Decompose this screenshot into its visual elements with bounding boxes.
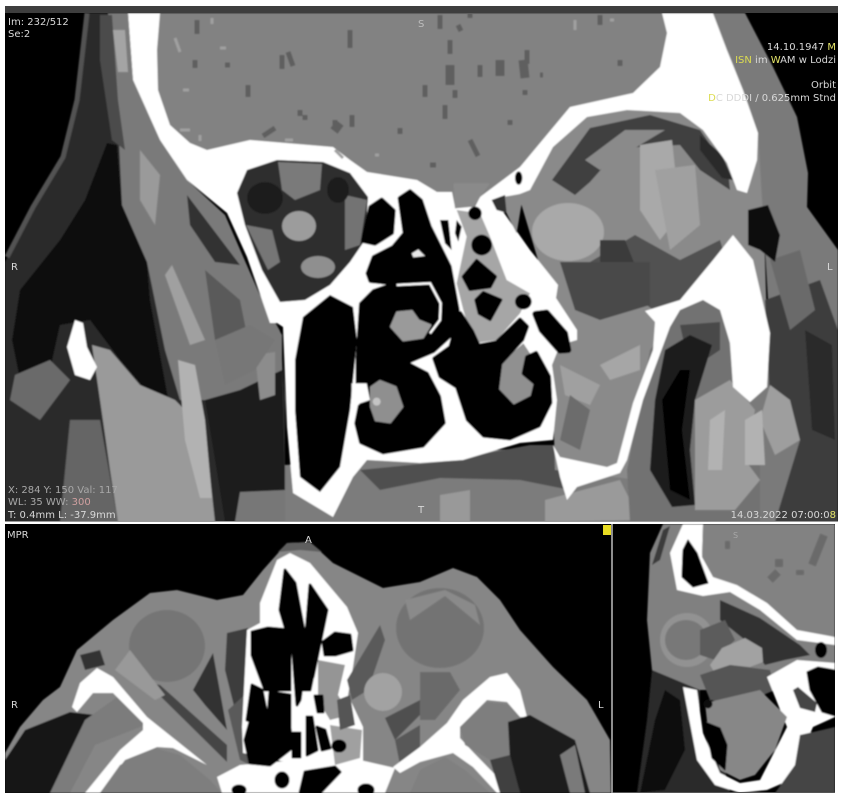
study date and time: 14.03.2022 07:00:08: [731, 510, 836, 521]
panel: axial MPR view: [5, 524, 611, 795]
brain tissue: [702, 524, 835, 637]
face soft tissue: [5, 542, 611, 793]
right lateral orbital bone: [72, 668, 207, 793]
divider between lower views: [611, 524, 613, 793]
right temporal fossa fat: [5, 712, 95, 793]
sphenoid soft tissue: [330, 725, 362, 765]
right temporal lobe: [100, 748, 222, 793]
lower panel edge: [5, 521, 838, 522]
orientation marker A: A: [305, 535, 312, 546]
facial soft tissue: [647, 524, 835, 690]
orientation marker S: S: [418, 19, 424, 30]
left temporalis and fat: [460, 702, 590, 793]
scan background: [613, 524, 835, 793]
lower border line: [613, 792, 835, 793]
left lateral orbital bone: [393, 673, 527, 793]
temporal bone fragment: [67, 320, 97, 380]
ethmoid and nasal air cells: [352, 171, 568, 452]
posterior ethmoid air: [815, 642, 827, 658]
panel: sagittal view: [613, 524, 835, 793]
brain tissue: [157, 13, 667, 207]
patient details: 14.10.1947 M: [767, 42, 836, 53]
sphenoid air: [807, 667, 835, 716]
cursor and window readout: T: 0.4mm L: -37.9mm: [7, 510, 116, 521]
frontal sinus air: [682, 540, 708, 587]
maxillary sinus air: [295, 295, 357, 492]
right-side facial soft tissue: [5, 13, 285, 522]
cursor and window readout: WL: 35 WW: 300: [8, 497, 91, 508]
nasal tip tissue: [278, 542, 322, 552]
maxillary sinus contents: [705, 690, 787, 780]
brain texture: [725, 535, 824, 580]
scan background: [5, 6, 838, 522]
orbital mass: [710, 638, 763, 675]
scan background: [5, 524, 611, 793]
right temporalis: [50, 695, 145, 793]
sphenoid bone: [217, 760, 395, 793]
orientation marker L: L: [598, 700, 604, 711]
left orbit and soft tissue base: [490, 13, 838, 522]
series info: Se:2: [8, 29, 30, 40]
maxillary sinus air: [705, 722, 727, 770]
patient details: DC DDDI / 0.625mm Stnd: [708, 93, 836, 104]
orbit dark fat: [720, 600, 810, 665]
top toolbar strip: [5, 6, 838, 13]
nasal bone and sinus frame: [242, 553, 363, 777]
sagittal CT anatomy: [637, 524, 835, 793]
patient details: Orbit: [811, 80, 836, 91]
axial CT anatomy: [5, 542, 611, 795]
orientation marker S: S: [733, 531, 738, 540]
left orbit tissue mass: [337, 588, 484, 765]
orientation marker R: R: [11, 262, 18, 273]
ethmoid soft tissue: [318, 660, 350, 720]
active view marker: [603, 525, 612, 535]
right orbit muscles and fat: [80, 628, 280, 764]
ethmoid cell: [793, 687, 817, 712]
orientation marker L: L: [827, 262, 833, 273]
panel: coronal CT view: [5, 6, 838, 523]
infraorbital tissue: [700, 665, 775, 705]
small air pocket: [704, 700, 712, 708]
fat dark core: [640, 690, 685, 793]
MPR label: MPR: [7, 530, 29, 541]
cursor and window readout: X: 284 Y: 150 Val: 117: [8, 485, 118, 496]
brain texture flecks: [195, 10, 620, 180]
eye globe: [660, 613, 735, 667]
maxillary bone frame: [683, 660, 835, 793]
orientation marker R: R: [11, 700, 18, 711]
lateral orbital wall bone: [553, 235, 770, 500]
patient details: ISN im WAM w Lodzi: [735, 55, 836, 66]
upper lid tissue: [652, 526, 670, 565]
series info: Im: 232/512: [8, 17, 69, 28]
patient details: [708, 42, 836, 104]
skull base bone: [128, 13, 758, 517]
orientation marker T: T: [417, 505, 425, 516]
right orbit contents: [237, 160, 368, 302]
skin and subcutaneous fat: [637, 670, 730, 793]
left temporal lobe: [410, 757, 490, 793]
frontal bone and sinus wall: [670, 524, 835, 645]
right eye globe: [129, 610, 205, 682]
coronal CT anatomy: [5, 10, 838, 522]
nasal and sinus air: [233, 570, 373, 795]
skull base tissue: [775, 727, 835, 793]
lower midface tissue: [285, 440, 650, 522]
